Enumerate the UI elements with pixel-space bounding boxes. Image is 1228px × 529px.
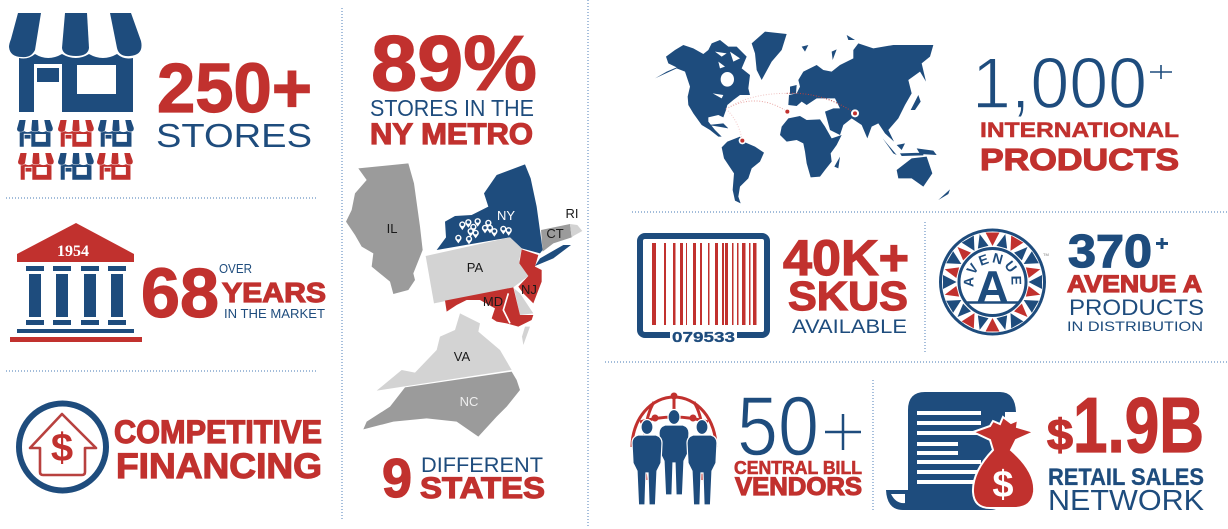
map labels: state abbreviations: CT [546, 226, 564, 241]
icon: barcode [640, 236, 767, 346]
stat: plus sign [825, 414, 861, 450]
label: SKUs: SKUS [788, 273, 908, 319]
panel: $1.9B retail sales network [886, 381, 1205, 517]
icon: scroll and money bag [886, 392, 1034, 510]
label: over: OVER [219, 261, 252, 276]
stat: 50: 50 [737, 379, 819, 473]
label: network: NETWORK [1048, 485, 1205, 517]
stat: dollar sign: $ [1047, 411, 1073, 460]
panel: competitive financing [19, 404, 322, 490]
icon: Avenue A logo: TM [1043, 252, 1049, 257]
origin dots [739, 108, 859, 144]
label: products: PRODUCTS [1069, 295, 1204, 320]
label: stores in the: STORES IN THE [370, 95, 534, 121]
stat: plus sign [1156, 238, 1168, 249]
label: vendors: VENDORS [735, 473, 862, 501]
map labels: state abbreviations: PA [467, 260, 484, 275]
stat: 68: 68 [141, 254, 219, 332]
map: states served [346, 163, 582, 437]
icon: vendors with globe [632, 392, 717, 505]
map labels: state abbreviations: MD [483, 294, 503, 309]
icon: Avenue A logo [939, 228, 1049, 336]
continents [655, 32, 950, 203]
label: in distribution: IN DISTRIBUTION [1067, 318, 1203, 334]
map labels: state abbreviations: RI [566, 206, 578, 221]
label: stores: STORES [156, 117, 312, 154]
icon: scroll and money bag: $ [992, 464, 1014, 506]
icon: bank building [10, 223, 142, 342]
state: Pennsylvania [426, 237, 528, 303]
panel: 1,000+ international products [972, 44, 1179, 177]
label: central bill: CENTRAL BILL [734, 458, 862, 478]
stat: 370: 370 [1068, 225, 1152, 277]
state: Long Island [535, 245, 571, 266]
panel: 68 years [10, 223, 326, 342]
panel: 50+ central bill vendors [632, 379, 862, 505]
state: Maryland [445, 287, 533, 327]
icon: house with dollar [19, 404, 106, 490]
label: NY metro: NY METRO [370, 118, 533, 151]
panel: 9 different states [382, 447, 545, 509]
panel: 250+ stores [9, 13, 312, 180]
chart: world map with import routes [655, 32, 950, 203]
state: Virginia shore [522, 327, 530, 345]
label: years: YEARS [222, 277, 326, 308]
icon: house with dollar: $ [51, 426, 73, 470]
map labels: state abbreviations: NY [497, 208, 515, 223]
route lines [726, 93, 855, 141]
label: retail sales: RETAIL SALES [1048, 464, 1204, 491]
label: in the market: IN THE MARKET [224, 306, 325, 321]
state: Illinois [346, 163, 423, 294]
state: New Jersey [518, 249, 542, 303]
Hudson Bay and lakes cutouts [713, 52, 740, 98]
stat: 250+: 250+ [157, 49, 312, 127]
icon: bank building: 1954 [57, 243, 89, 260]
label: different: DIFFERENT [421, 454, 543, 477]
map labels: state abbreviations: NC [460, 394, 478, 409]
map labels: state abbreviations: IL [387, 221, 397, 236]
icon: Avenue A logo: A [976, 261, 1009, 313]
icon: large storefront [9, 13, 142, 112]
label: products: PRODUCTS [980, 142, 1179, 177]
label: international: INTERNATIONAL [980, 119, 1179, 142]
label: available: AVAILABLE [792, 317, 907, 338]
map labels: state abbreviations: VA [454, 349, 471, 364]
state: Rhode Island [570, 224, 582, 237]
label: Avenue A: AVENUE A [1067, 271, 1202, 298]
state: Virginia [377, 313, 512, 391]
state: Connecticut [541, 224, 572, 252]
panel: 40K+ SKUs [640, 230, 909, 346]
icon: Avenue A logo: AVENUE [964, 253, 1022, 287]
heading: financing: FINANCING [116, 447, 322, 486]
map labels: state abbreviations: NJ [521, 282, 537, 297]
stat: 89%: 89% [371, 19, 537, 107]
state: New York [437, 164, 543, 253]
label: states: STATES [420, 472, 545, 505]
stat: plus sign [1150, 65, 1172, 79]
panel: Avenue A products [939, 225, 1204, 336]
icon: store pins [455, 218, 512, 244]
stat: 9: 9 [382, 447, 412, 509]
icon: row of small storefronts [17, 120, 134, 180]
stat: 1,000: 1,000 [972, 44, 1147, 124]
state: North Carolina [363, 372, 520, 437]
icon: barcode: 079533 [672, 329, 735, 346]
map labels: state abbreviations [387, 206, 578, 409]
stat: 40K+: 40K+ [783, 230, 909, 286]
panel: 89% stores in NY metro [370, 19, 537, 151]
heading: competitive: COMPETITIVE [114, 414, 322, 450]
state: Delaware [514, 288, 533, 315]
